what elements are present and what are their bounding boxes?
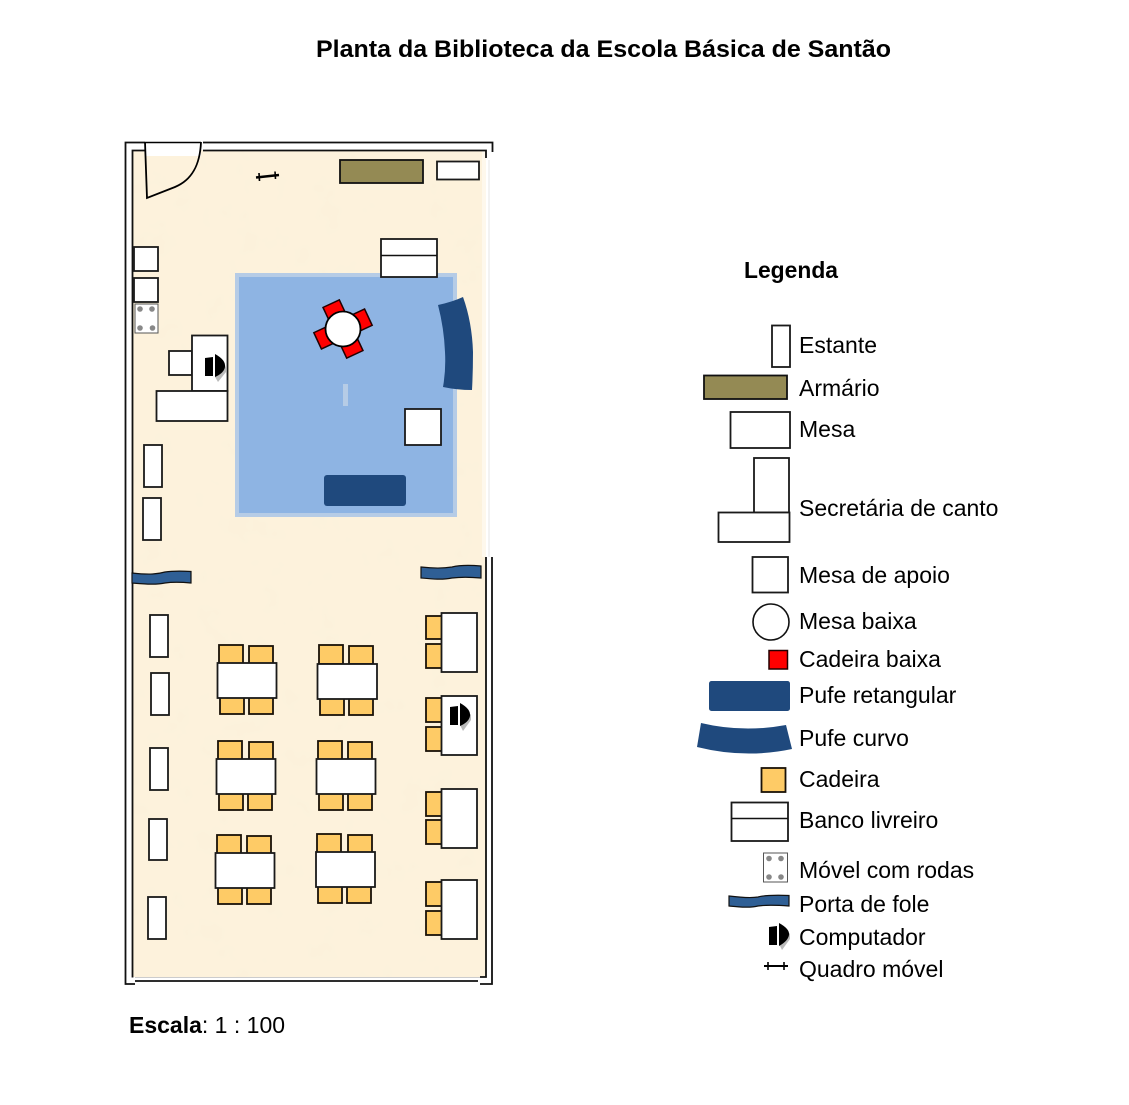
rug <box>237 275 455 515</box>
legend: mobile board: Quadro móvel <box>799 956 943 982</box>
table group 4 <box>316 741 376 810</box>
legend: corner desk <box>718 458 998 542</box>
table top right <box>437 162 479 180</box>
legend: curved pouf <box>697 723 909 754</box>
legend <box>697 257 998 982</box>
legend: cabinet: Armário <box>799 375 880 401</box>
legend: table <box>730 412 855 448</box>
door <box>145 142 201 198</box>
table group 2 <box>318 645 377 715</box>
legend: bookcase <box>772 326 877 367</box>
table group 6 <box>316 834 375 903</box>
legend: book bench <box>732 802 938 841</box>
legend: support table: Mesa de apoio <box>799 562 950 588</box>
legend: curved pouf: Pufe curvo <box>799 725 909 751</box>
legend: low table: Mesa baixa <box>799 608 917 634</box>
floor <box>133 150 486 977</box>
legend heading: Legenda <box>744 257 838 283</box>
legend: corner desk: Secretária de canto <box>799 495 998 521</box>
legend: computer: Computador <box>799 924 926 950</box>
icon: mobile board <box>256 172 279 181</box>
legend: folding door <box>729 891 929 917</box>
light mark on rug <box>343 384 348 406</box>
title: Planta da Biblioteca da Escola Básica de Santão <box>316 36 891 63</box>
legend: low chair: Cadeira baixa <box>799 646 941 672</box>
corner desk <box>156 336 228 421</box>
right table 4 <box>426 880 477 939</box>
curved pouf <box>438 297 473 390</box>
right table 2 with computer <box>426 696 477 755</box>
support table <box>405 409 441 445</box>
legend: rectangular pouf: Pufe retangular <box>799 682 957 708</box>
rectangular pouf <box>324 475 406 506</box>
walls <box>126 142 492 984</box>
legend: chair: Cadeira <box>799 766 880 792</box>
right table 3 <box>426 789 477 848</box>
left wall units <box>134 247 158 302</box>
wheeled unit <box>135 304 158 333</box>
legend: cabinet <box>704 375 880 401</box>
table group 1 <box>218 645 276 714</box>
legend: book bench: Banco livreiro <box>799 807 938 833</box>
table group 3 <box>216 741 276 810</box>
legend: table: Mesa <box>799 416 855 442</box>
legend: bookcase: Estante <box>799 332 877 358</box>
right table 1 <box>426 613 477 672</box>
folding door left <box>132 571 191 584</box>
floor plan <box>126 142 492 984</box>
icon: computer <box>205 354 226 382</box>
legend: low table <box>753 604 917 640</box>
book bench <box>381 239 437 277</box>
legend: rectangular pouf <box>709 681 957 711</box>
cabinet <box>340 160 423 183</box>
legend: folding door: Porta de fole <box>799 891 929 917</box>
bookcases left <box>143 445 169 939</box>
folding door right <box>421 565 481 579</box>
table group 5 <box>216 835 274 904</box>
legend: support table <box>752 557 950 592</box>
legend: wheeled unit: Móvel com rodas <box>799 857 974 883</box>
low chairs and low table <box>314 300 372 358</box>
legend: chair <box>762 766 880 792</box>
scale: Escala: 1 : 100 <box>129 1012 285 1038</box>
